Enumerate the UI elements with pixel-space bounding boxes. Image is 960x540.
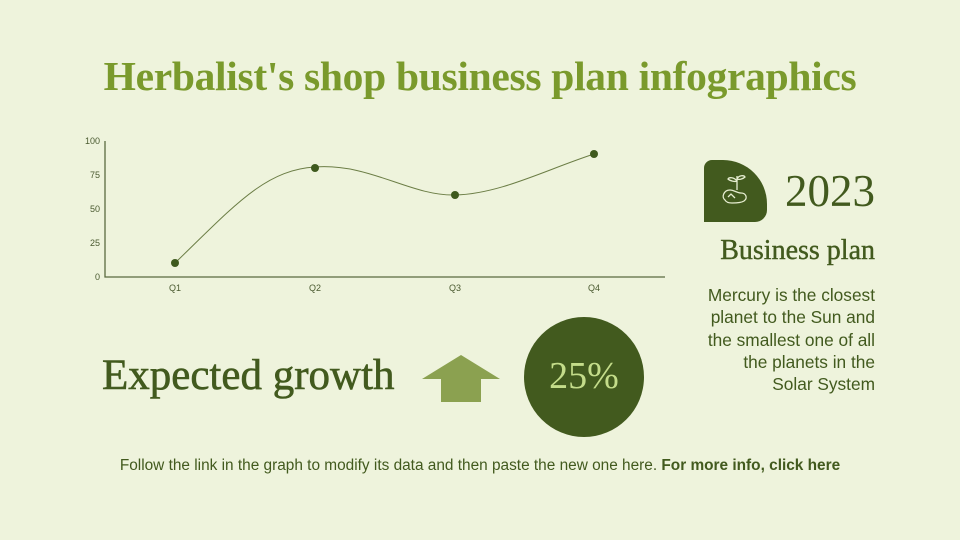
arrow up bbox=[422, 355, 500, 402]
icon: leaf with sprout bbox=[704, 160, 767, 222]
line chart: 0 bbox=[95, 272, 100, 282]
line chart: Q4 bbox=[588, 283, 600, 293]
line chart: 25 bbox=[90, 238, 100, 248]
year: 2023 bbox=[785, 166, 875, 216]
text block: the smallest one of all bbox=[708, 330, 875, 350]
line chart: 50 bbox=[90, 204, 100, 214]
circle: 25% bbox=[524, 317, 644, 437]
title: Herbalist's shop business plan infographics bbox=[104, 53, 856, 99]
line chart: Q2 bbox=[309, 283, 321, 293]
text block: Solar System bbox=[772, 374, 875, 394]
text block: planet to the Sun and bbox=[711, 307, 875, 327]
circle: 25%: 25% bbox=[549, 355, 619, 397]
heading: business plan: Business plan bbox=[720, 235, 875, 266]
line chart: Q1 bbox=[169, 283, 181, 293]
heading: expected growth: Expected growth bbox=[102, 352, 395, 399]
footer text: Follow the link in the graph to modify its data and then paste the new one here. For more info, click here bbox=[120, 457, 840, 474]
text block bbox=[708, 285, 875, 394]
line chart: Q3 bbox=[449, 283, 461, 293]
text block: the planets in the bbox=[743, 352, 875, 372]
line chart: 100 bbox=[85, 136, 100, 146]
text block: Mercury is the closest bbox=[708, 285, 875, 305]
line chart: 75 bbox=[90, 170, 100, 180]
